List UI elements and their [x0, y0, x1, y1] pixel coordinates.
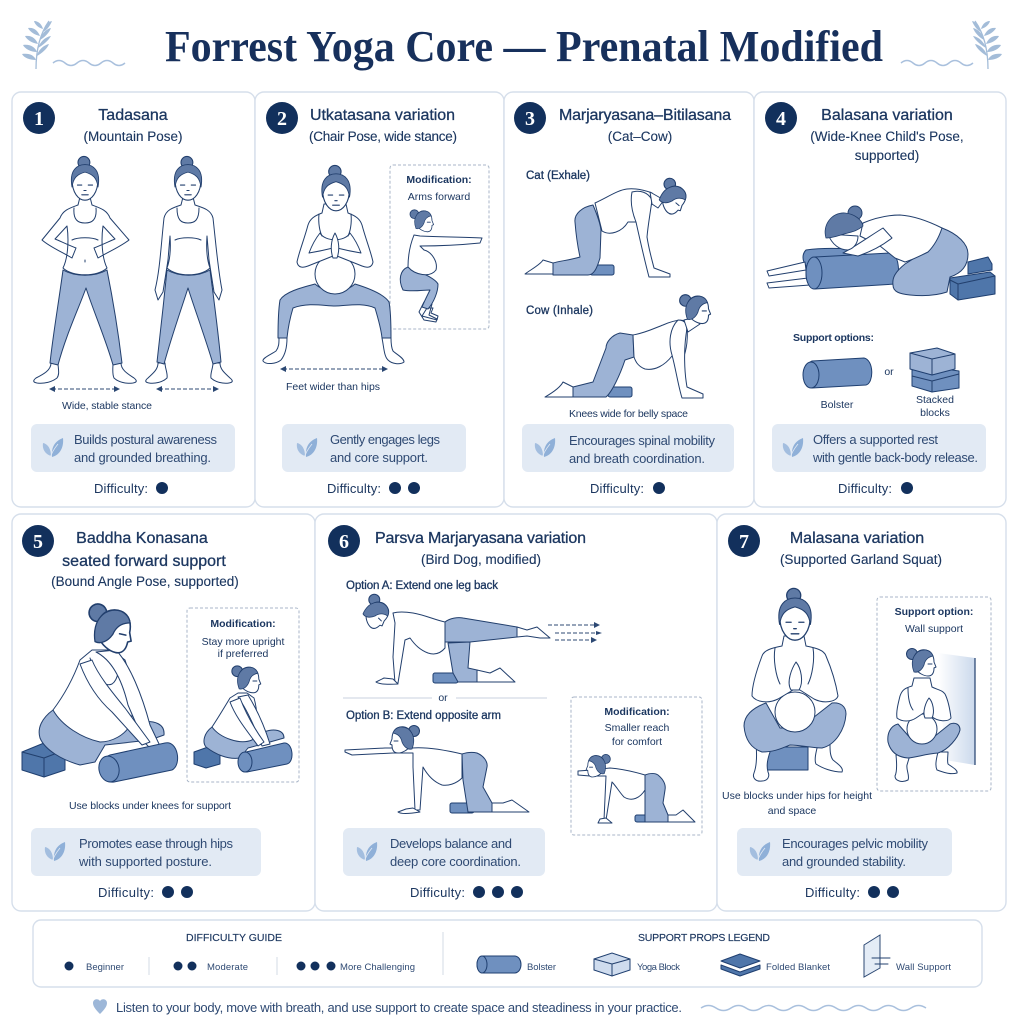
- difficulty rating: [805, 885, 899, 900]
- icon: left fern decoration: [22, 21, 52, 69]
- heading: [51, 530, 239, 589]
- number badge 2: 2: [277, 108, 287, 130]
- difficulty guide: DIFFICULTY GUIDE: [186, 932, 282, 944]
- panel: card 2 Utkatasana: [255, 92, 504, 507]
- support props legend: Folded Blanket: [766, 962, 830, 973]
- modification box: Stay more upright: [202, 636, 285, 648]
- panel: card 1 Tadasana: [12, 92, 255, 507]
- arrows: stance width: [49, 386, 219, 392]
- heading: [375, 530, 586, 567]
- figure: supported garland squat: [744, 588, 846, 781]
- modification box: if preferred: [218, 648, 269, 660]
- support options: Support options:: [793, 332, 874, 344]
- benefit box: and grounded stability.: [782, 854, 906, 869]
- heading: [559, 107, 731, 144]
- heading: [309, 107, 457, 144]
- heading: Parsva Marjaryasana variation: [375, 530, 586, 547]
- benefit box: and core support.: [330, 450, 428, 465]
- heading: (Bound Angle Pose, supported): [51, 574, 239, 589]
- footer note: Listen to your body, move with breath, and use support to create space and steadiness in your practice.: [116, 1000, 682, 1015]
- benefit box: Builds postural awareness: [74, 432, 218, 447]
- benefit box: [343, 828, 545, 876]
- benefit box: Offers a supported rest: [813, 432, 938, 447]
- heading: (Wide-Knee Child's Pose,: [810, 129, 964, 144]
- difficulty rating: Difficulty:: [94, 481, 148, 496]
- benefit box: Encourages pelvic mobility: [782, 836, 928, 851]
- number badge 4: [765, 102, 797, 134]
- heading: Marjaryasana–Bitilasana: [559, 107, 731, 124]
- modification box: [187, 608, 299, 782]
- difficulty rating: [410, 885, 523, 900]
- modification box: [571, 697, 702, 835]
- difficulty rating: Difficulty:: [98, 885, 154, 900]
- figure: option A extend leg: [355, 592, 550, 684]
- panel: card 5 Baddha Konasana: [12, 514, 315, 911]
- figure: supported bound angle pose: [22, 602, 178, 784]
- benefit box: and grounded breathing.: [74, 450, 211, 465]
- support props legend: Bolster: [527, 962, 556, 973]
- modification box: Smaller reach: [605, 722, 670, 734]
- heading: (Mountain Pose): [83, 129, 183, 144]
- support props legend: [477, 932, 951, 977]
- heading: (Supported Garland Squat): [780, 552, 942, 567]
- panel: card 4 Balasana: [754, 92, 1006, 507]
- title: Forrest Yoga Core — Prenatal Modified: [165, 22, 883, 71]
- caption: [722, 790, 872, 817]
- heading: (Bird Dog, modified): [421, 552, 541, 567]
- modification box: Modification:: [406, 174, 472, 186]
- panel: card 6 Parsva Marjaryasana: [315, 514, 717, 911]
- difficulty rating: Difficulty:: [410, 885, 465, 900]
- number badge 6: 6: [339, 531, 349, 553]
- label option A: Option A: Extend one leg back: [346, 580, 498, 592]
- figure: option B extend arm: [345, 726, 529, 814]
- difficulty rating: [98, 885, 193, 900]
- figure: chair pose wide stance: [263, 165, 404, 364]
- number badge 3: [514, 102, 546, 134]
- arrow: stance width: [280, 366, 388, 372]
- benefit box: [31, 828, 261, 876]
- number badge 3: 3: [525, 108, 535, 130]
- modification box: Modification:: [210, 618, 276, 630]
- number badge 2: [266, 102, 298, 134]
- caption: Wide, stable stance: [62, 400, 152, 412]
- figure: cow pose: [545, 295, 711, 398]
- difficulty guide: Moderate: [207, 962, 248, 973]
- heading: [810, 107, 964, 163]
- number badge 6: [328, 525, 360, 557]
- heading: (Cat–Cow): [608, 129, 672, 144]
- support option box: Wall support: [905, 623, 963, 635]
- support option box: [877, 597, 991, 791]
- benefit box: [31, 424, 235, 472]
- modification box: for comfort: [612, 736, 662, 748]
- support options: [793, 332, 959, 419]
- icon: left wave: [53, 60, 125, 66]
- icon: right wave: [901, 60, 973, 66]
- difficulty rating: Difficulty:: [590, 481, 644, 496]
- heading: Tadasana: [98, 107, 168, 124]
- difficulty guide: More Challenging: [340, 962, 415, 973]
- difficulty rating: Difficulty:: [838, 481, 892, 496]
- support props legend: SUPPORT PROPS LEGEND: [638, 932, 770, 944]
- support options: Bolster: [821, 399, 854, 411]
- support props legend: Wall Support: [896, 962, 951, 973]
- heading: (Chair Pose, wide stance): [309, 129, 457, 144]
- number badge 5: 5: [33, 531, 43, 553]
- heading: Balasana variation: [821, 107, 953, 124]
- heading: Malasana variation: [790, 530, 924, 547]
- number badge 1: [23, 102, 55, 134]
- difficulty guide: Beginner: [86, 962, 124, 973]
- figure: supported child's pose: [767, 206, 995, 300]
- difficulty rating: Difficulty:: [805, 885, 860, 900]
- benefit box: [737, 828, 952, 876]
- modification box: Arms forward: [408, 191, 470, 203]
- caption: Use blocks under knees for support: [69, 800, 231, 812]
- figure: hands on hips: [34, 156, 136, 383]
- panel: card 7 Malasana: [717, 514, 1006, 911]
- benefit box: Encourages spinal mobility: [569, 433, 716, 448]
- heading: Baddha Konasana: [76, 530, 208, 547]
- modification box: Modification:: [604, 706, 670, 718]
- icon: right fern decoration: [972, 21, 1002, 69]
- heading: Utkatasana variation: [310, 107, 455, 124]
- arrows: leg direction: [548, 622, 602, 643]
- difficulty rating: [327, 481, 420, 496]
- icon: heart: [93, 999, 107, 1014]
- label cow: Cow (Inhale): [526, 305, 593, 317]
- benefit box: deep core coordination.: [390, 854, 521, 869]
- benefit box: Gently engages legs: [330, 432, 440, 447]
- modification box: [390, 165, 489, 329]
- benefit box: [522, 424, 734, 472]
- label cat: Cat (Exhale): [526, 170, 590, 182]
- benefit box: and breath coordination.: [569, 451, 705, 466]
- figure: cat pose: [525, 176, 693, 277]
- panel: card 3 Cat-Cow: [504, 92, 754, 507]
- number badge 7: 7: [739, 531, 749, 553]
- support props legend: Yoga Block: [637, 962, 680, 973]
- benefit box: [282, 424, 466, 472]
- caption: Feet wider than hips: [286, 381, 380, 393]
- heading: [780, 530, 942, 567]
- number badge 1: 1: [34, 108, 44, 130]
- divider or: or: [438, 692, 448, 704]
- figure: arms at sides: [146, 156, 232, 383]
- benefit box: Promotes ease through hips: [79, 836, 234, 851]
- heading: [83, 107, 183, 144]
- number badge 4: 4: [776, 108, 786, 130]
- support option box: Support option:: [895, 606, 973, 618]
- benefit box: with supported posture.: [78, 854, 212, 869]
- icon: footer wave: [701, 1006, 926, 1010]
- heading: seated forward support: [62, 553, 226, 570]
- number badge 5: [22, 525, 54, 557]
- support options: or: [884, 366, 894, 378]
- label option B: Option B: Extend opposite arm: [346, 710, 501, 722]
- caption: Knees wide for belly space: [569, 408, 688, 420]
- benefit box: Develops balance and: [390, 836, 512, 851]
- support options: Stacked: [916, 394, 954, 406]
- benefit box: with gentle back-body release.: [812, 450, 978, 465]
- number badge 7: [728, 525, 760, 557]
- support options: blocks: [920, 407, 950, 419]
- caption: Use blocks under hips for height: [722, 790, 872, 802]
- benefit box: [772, 424, 986, 472]
- panel: legend: [33, 920, 982, 987]
- difficulty guide: [64, 932, 415, 973]
- heading: supported): [855, 148, 919, 163]
- caption: and space: [768, 805, 816, 817]
- difficulty rating: Difficulty:: [327, 481, 381, 496]
